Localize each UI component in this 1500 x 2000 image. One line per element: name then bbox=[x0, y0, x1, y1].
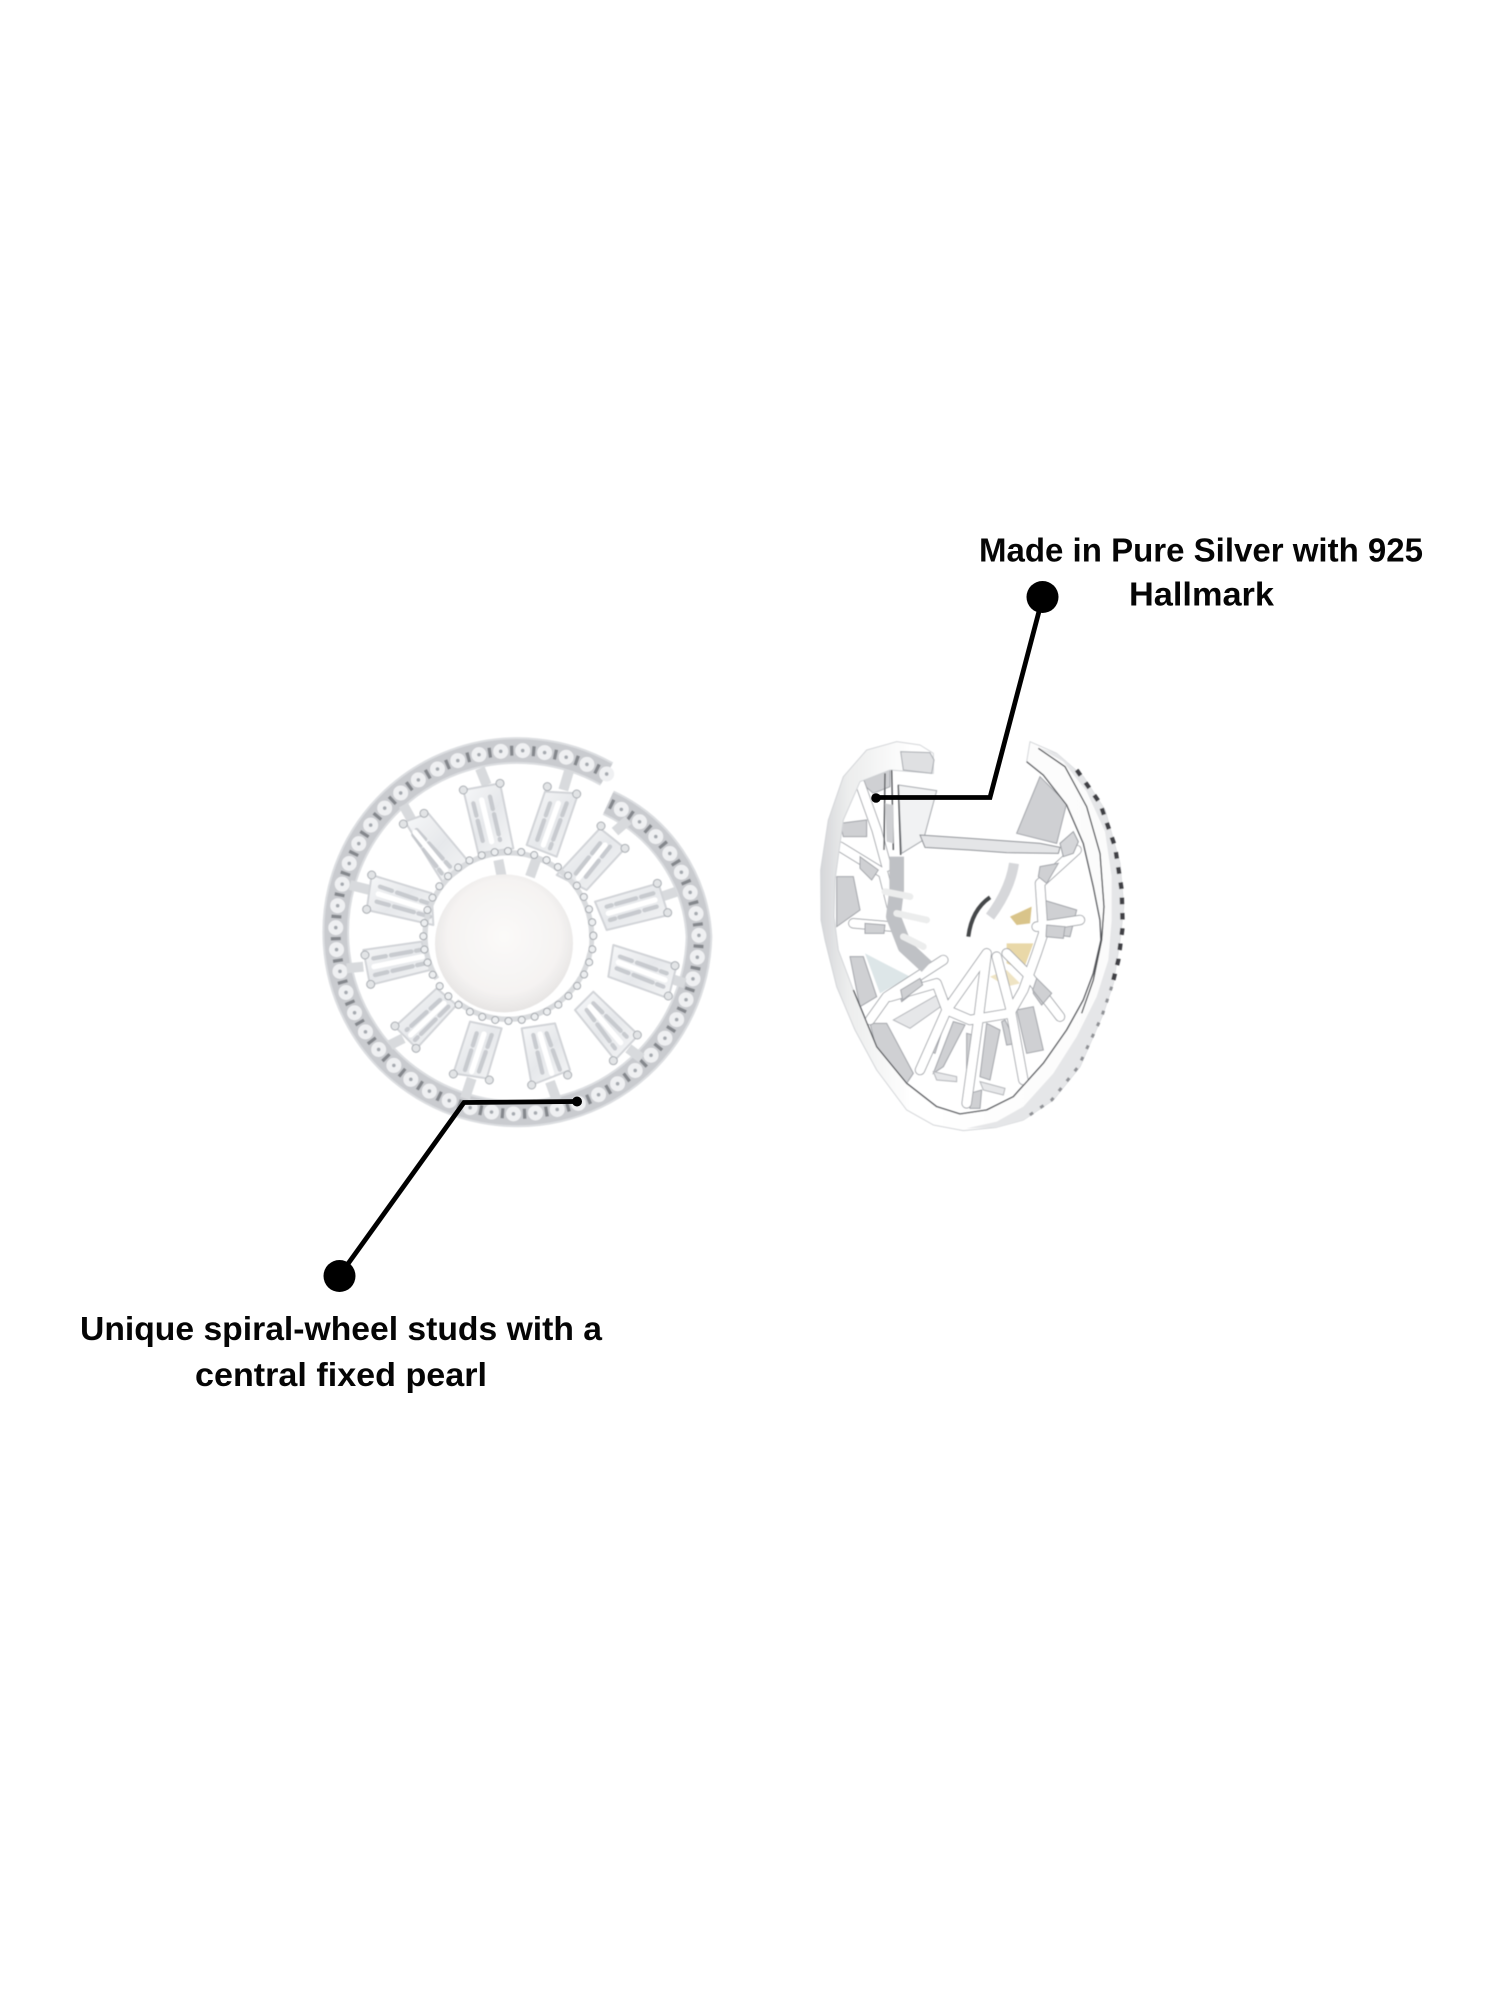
back windows bbox=[860, 857, 1065, 1003]
spiral pave band bbox=[336, 751, 699, 1114]
pale mirror reflection bbox=[865, 953, 910, 993]
label text bbox=[80, 1310, 603, 1393]
leader line bbox=[878, 600, 1042, 798]
top clasp stone bbox=[901, 752, 934, 773]
label text: Unique spiral-wheel studs with a bbox=[80, 1310, 603, 1347]
callout: pure silver bbox=[871, 532, 1423, 803]
dark pearl post bbox=[968, 897, 990, 937]
label text: Made in Pure Silver with 925 bbox=[979, 532, 1423, 568]
gold pearl back glimpses bbox=[990, 907, 1033, 987]
earring: side view showing back of wheel bbox=[821, 742, 1124, 1131]
marker dot large bbox=[324, 1260, 356, 1292]
earring: front view spiral wheel stud bbox=[336, 751, 699, 1114]
baguette stones bbox=[361, 779, 679, 1089]
clasp block bbox=[884, 770, 937, 855]
spokes and inner arc bbox=[840, 783, 1080, 1103]
connector stubs bbox=[347, 768, 685, 1100]
textured back settings bbox=[837, 770, 1077, 1108]
beaded setting around pearl bbox=[423, 851, 593, 1021]
pave edge teeth bbox=[1077, 770, 1123, 987]
label text bbox=[979, 532, 1423, 612]
lower pave teeth bbox=[1023, 987, 1112, 1119]
marker dot large bbox=[1026, 581, 1058, 613]
hinge and curved rear frame bbox=[885, 857, 927, 967]
pearl bbox=[435, 874, 573, 1012]
rim dark lines bbox=[853, 748, 1104, 1114]
pin bar bbox=[920, 835, 1060, 853]
curved frame bbox=[990, 863, 1014, 917]
label text: Hallmark bbox=[1129, 576, 1275, 612]
label text: central fixed pearl bbox=[195, 1356, 487, 1393]
pave band bbox=[967, 748, 1124, 1128]
marker dot small bbox=[572, 1096, 582, 1106]
pin catch bbox=[1060, 832, 1078, 857]
gap right of the pearl bbox=[563, 907, 589, 977]
leader line bbox=[344, 1102, 577, 1270]
rim bbox=[821, 742, 1124, 1131]
callout: spiral wheel bbox=[80, 1096, 603, 1393]
marker dot small bbox=[871, 793, 881, 803]
